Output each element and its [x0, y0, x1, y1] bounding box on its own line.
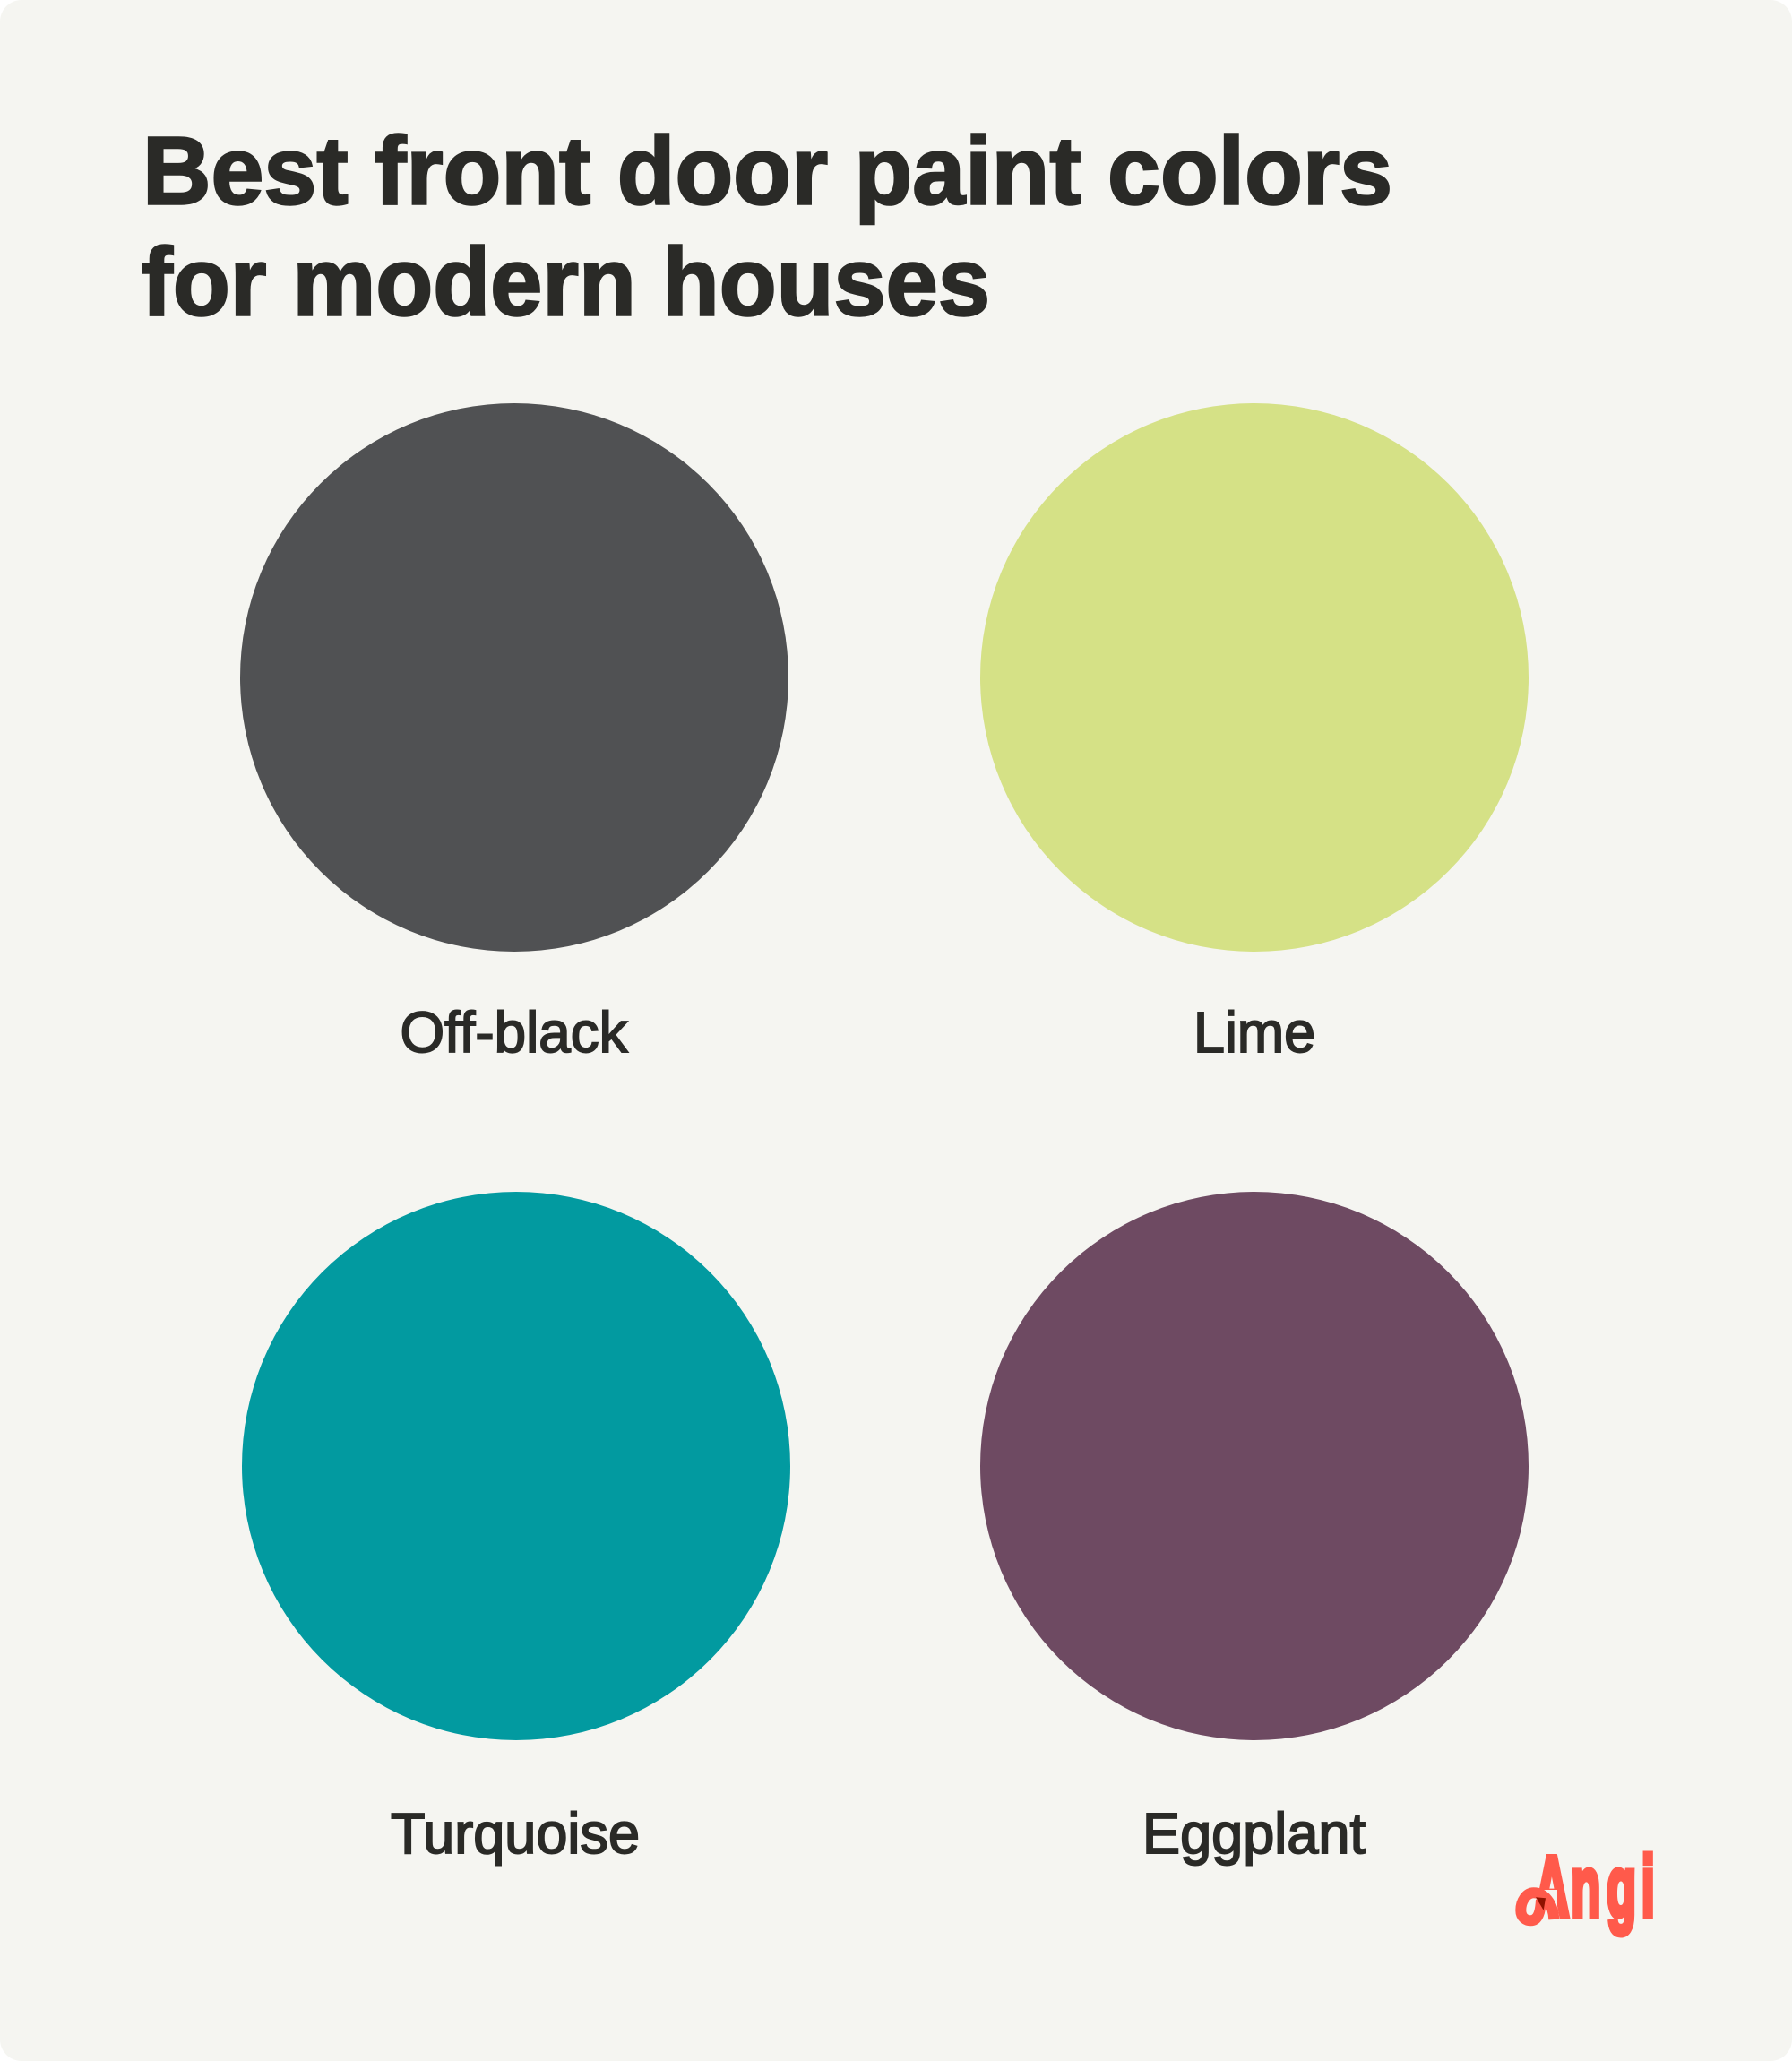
title: [142, 116, 1392, 335]
logo: Angi: Angi: [1534, 1840, 1655, 1935]
swatch: turquoise: [242, 1192, 790, 1866]
title: Best front door paint colors: [142, 116, 1392, 224]
swatch: lime: [980, 403, 1529, 1065]
label: lime: Lime: [1193, 1000, 1315, 1065]
title: for modern houses: [142, 228, 990, 335]
swatch: off-black: [240, 403, 788, 1065]
label: off-black: Off-black: [400, 1000, 628, 1065]
label: turquoise: Turquoise: [391, 1801, 640, 1866]
swatch: eggplant: [980, 1192, 1529, 1866]
label: eggplant: Eggplant: [1142, 1801, 1366, 1866]
